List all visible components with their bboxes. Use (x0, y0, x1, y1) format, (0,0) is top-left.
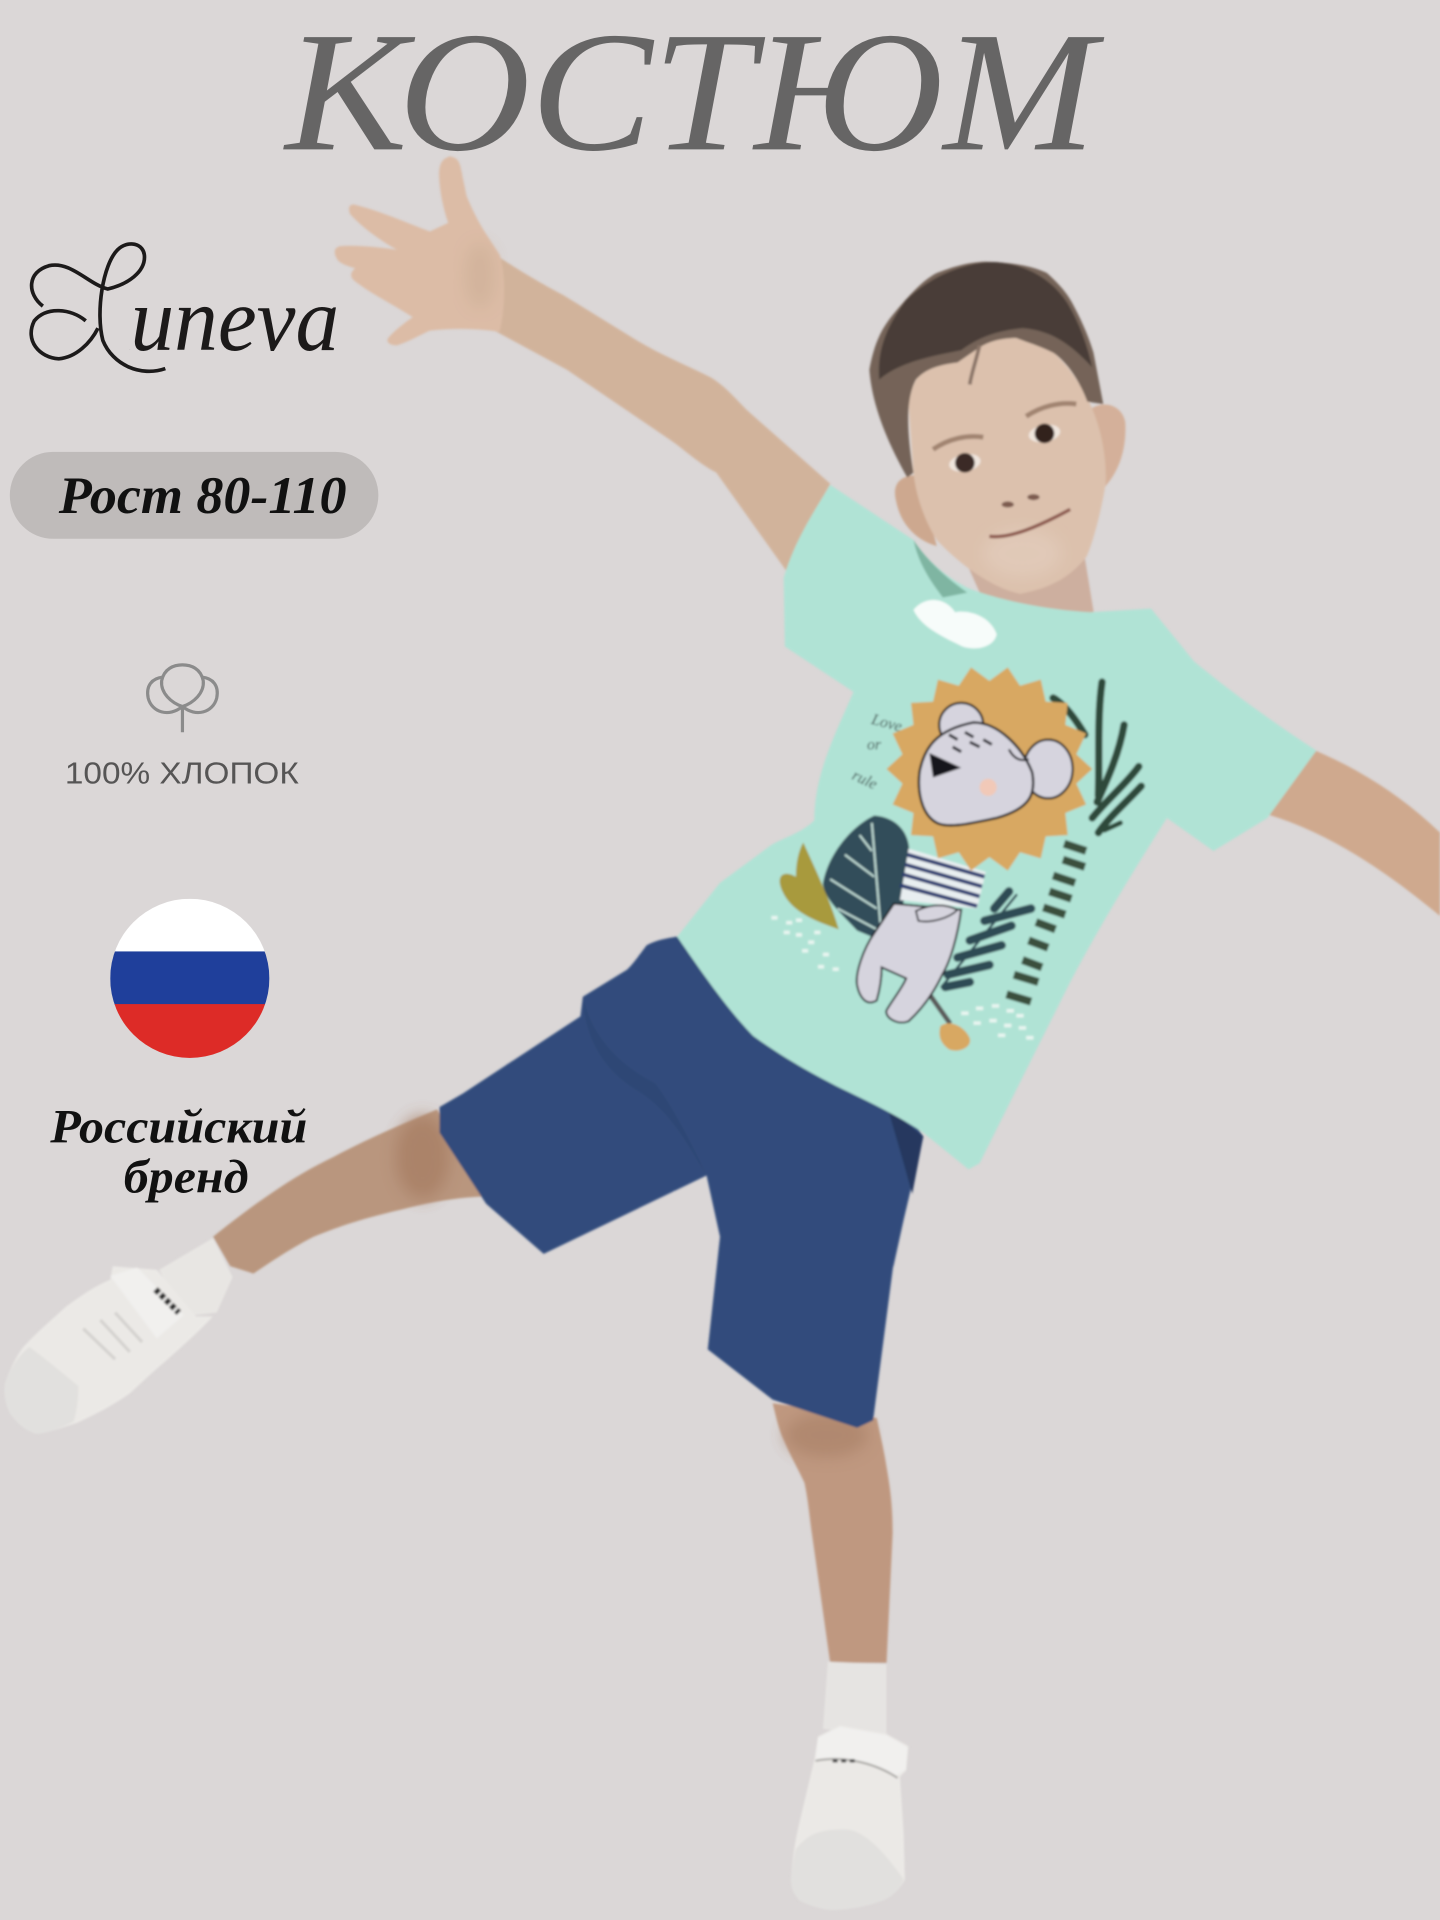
small shirt lettering: Love (869, 711, 904, 736)
small shirt lettering (849, 711, 904, 793)
brand logo: Luneva (129, 269, 339, 370)
head (869, 262, 1125, 594)
brand logo (31, 244, 339, 371)
title: КОСТЮМ (282, 0, 1105, 187)
cotton label: 100% ХЛОПОК (65, 757, 299, 791)
lion tail (929, 994, 950, 1024)
nose and mouth (1002, 501, 1014, 508)
right shoe (791, 1725, 909, 1910)
left shoe (4, 1266, 213, 1434)
brand origin text: бренд (124, 1151, 249, 1204)
white shirt patch (913, 600, 997, 648)
icon: russian flag (110, 899, 269, 1058)
small shirt lettering: or (867, 736, 882, 753)
sock (159, 1238, 233, 1316)
height pill: Рост 80-110 (58, 467, 347, 525)
sock (823, 1662, 887, 1734)
striped bars (1007, 844, 1086, 1002)
fern leaf (942, 891, 1031, 987)
brand origin text: Российский (49, 1100, 307, 1153)
lowered arm (1267, 749, 1440, 916)
standing leg (773, 1403, 893, 1663)
hair (869, 262, 1103, 478)
brand origin text (49, 1100, 307, 1204)
shorts (440, 937, 923, 1428)
ears (1084, 404, 1125, 490)
monstera leaf (823, 816, 909, 945)
raised arm and hand (335, 157, 830, 571)
white dots (771, 916, 1033, 1040)
t-shirt lion print (771, 667, 1141, 1051)
yellow leaf (780, 842, 839, 929)
lion ears (939, 703, 983, 747)
lion face (919, 722, 1033, 825)
palm leaves (1053, 682, 1141, 833)
height pill (10, 452, 378, 539)
face (909, 332, 1106, 594)
t-shirt (677, 485, 1316, 1169)
neck (961, 551, 1095, 618)
icon: cotton (148, 665, 217, 732)
striped top (900, 849, 986, 921)
kicked leg (213, 1109, 484, 1273)
eyes and brows (948, 452, 982, 474)
small shirt lettering: rule (849, 767, 880, 793)
lion body (857, 904, 961, 1023)
lion mane (887, 667, 1092, 871)
